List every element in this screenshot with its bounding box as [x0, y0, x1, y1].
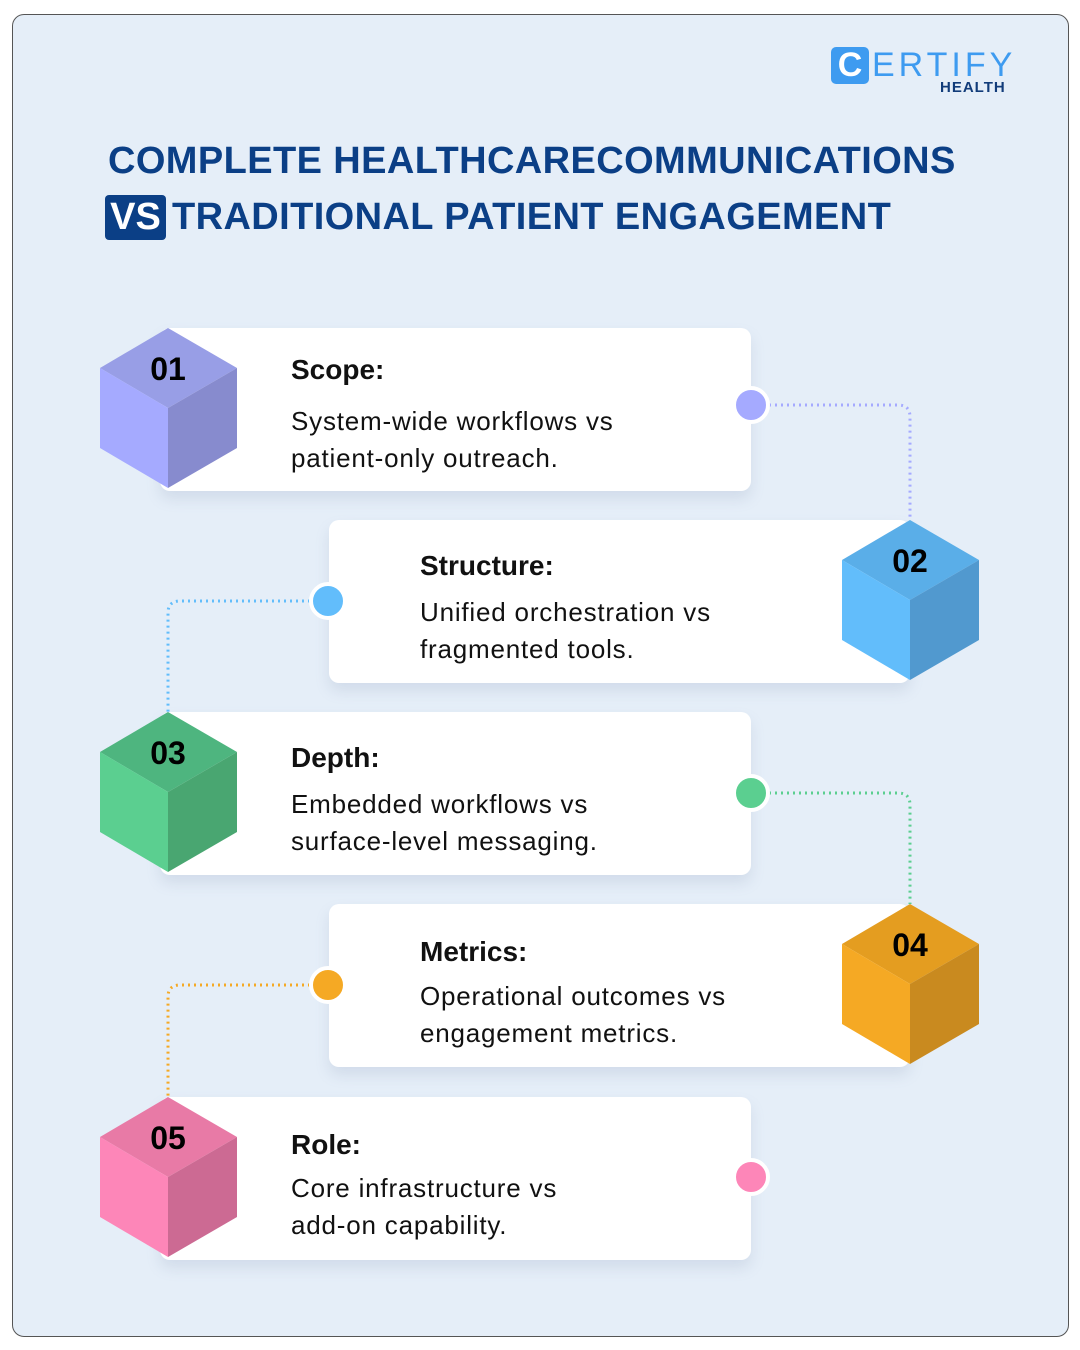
card 3: Depth: [291, 742, 380, 773]
connector 3-4 [751, 793, 910, 904]
card 4: Operational outcomes vs [420, 981, 726, 1011]
title: COMPLETE HEALTHCARECOMMUNICATIONS [108, 140, 956, 182]
logo: ERTIFY [872, 46, 1016, 84]
logo: HEALTH [940, 79, 1006, 96]
card 5: add-on capability. [291, 1210, 507, 1240]
logo: C [838, 46, 862, 84]
card 2: fragmented tools. [420, 634, 634, 664]
card 2 [329, 520, 910, 683]
card 4: engagement metrics. [420, 1018, 678, 1048]
card 5: Role: [291, 1129, 361, 1160]
card 1: patient-only outreach. [291, 443, 559, 473]
connector 1-2 [751, 405, 910, 520]
cube 03: 03 [150, 735, 186, 771]
dots [311, 388, 768, 1194]
cube 04 [842, 904, 979, 1064]
title: TRADITIONAL PATIENT ENGAGEMENT [172, 196, 891, 238]
card 5 [160, 1097, 751, 1260]
card 4: Metrics: [420, 936, 527, 967]
cube 05 [100, 1097, 237, 1257]
cube 04: 04 [892, 927, 928, 963]
card 2: Unified orchestration vs [420, 597, 711, 627]
cube 01 [100, 328, 237, 488]
card 3: Embedded workflows vs [291, 789, 588, 819]
cube 01: 01 [150, 351, 186, 387]
card 3 [160, 712, 751, 875]
cube 03 [100, 712, 237, 872]
card 1 [160, 328, 751, 491]
card 1: System-wide workflows vs [291, 406, 614, 436]
title: VS [110, 196, 161, 238]
title [105, 140, 956, 240]
card 1: Scope: [291, 354, 384, 385]
card 5: Core infrastructure vs [291, 1173, 557, 1203]
card 2: Structure: [420, 550, 554, 581]
card 3: surface-level messaging. [291, 826, 598, 856]
connector 4-5 [168, 985, 328, 1097]
cube 02 [842, 520, 979, 680]
logo [831, 46, 1016, 96]
cube 02: 02 [892, 543, 928, 579]
connector 2-3 [168, 601, 328, 712]
card 4 [329, 904, 910, 1067]
cube 05: 05 [150, 1120, 186, 1156]
